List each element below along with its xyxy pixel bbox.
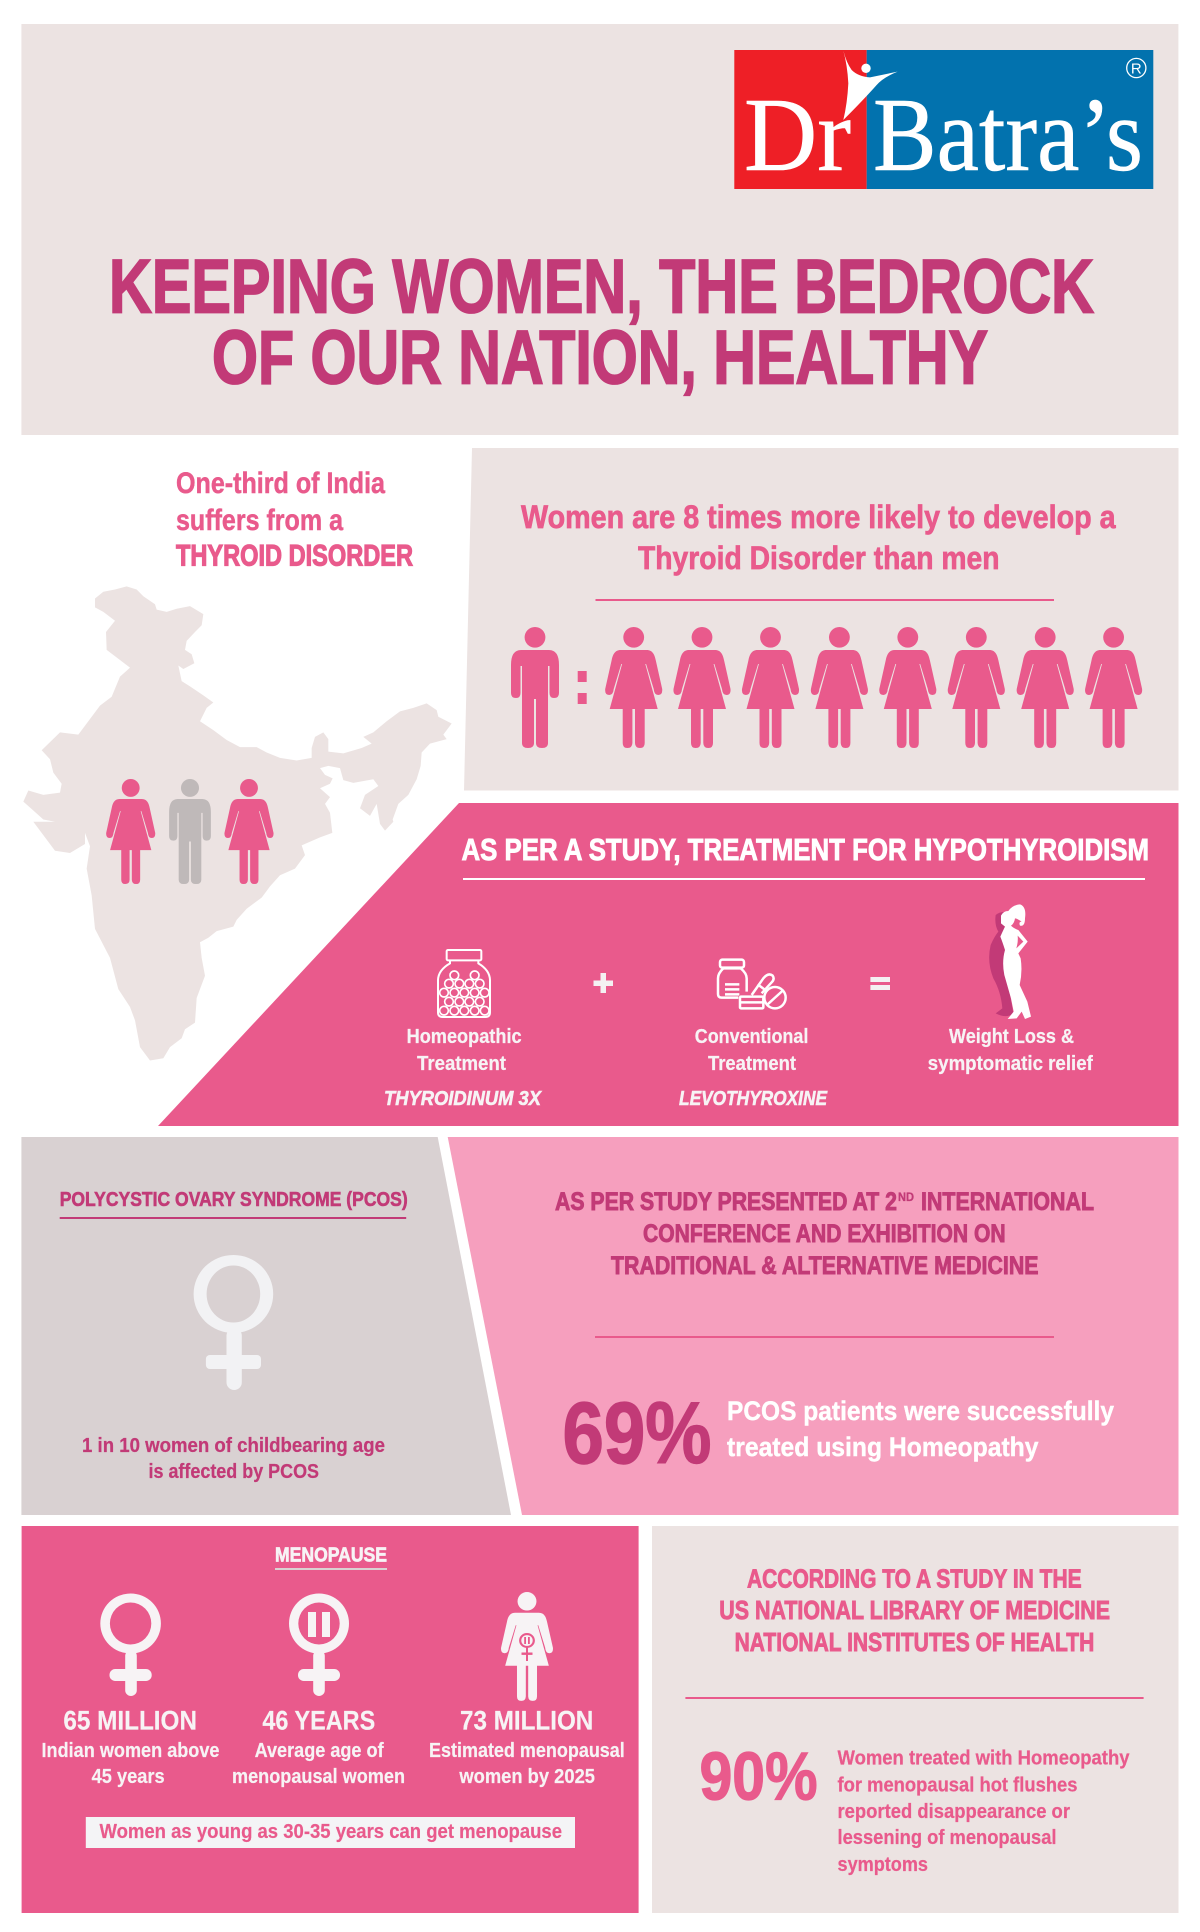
panel: menopause homeopathy study [652, 1526, 1178, 1913]
heading [719, 1564, 1110, 1657]
panel: header [21, 24, 1178, 435]
panel: hypothyroidism treatment [158, 803, 1178, 1126]
text block: conventional treatment: Treatment [708, 1053, 796, 1075]
stat: 46 years: 46 YEARS [262, 1706, 375, 1736]
heading: MENOPAUSE [275, 1544, 387, 1566]
text block: 1 in 10 women: is affected by PCOS [148, 1461, 319, 1483]
icon: man [169, 779, 211, 884]
text block: women treated with homeopathy: Women treated with Homeopathy [838, 1746, 1130, 1770]
text block: weight loss result: Weight Loss & [949, 1026, 1074, 1048]
text block: 1 in 10 women: 1 in 10 women of childbearing age [82, 1435, 385, 1457]
logo: Dr Batra's [734, 50, 1153, 193]
icon: weight loss silhouette [989, 904, 1031, 1019]
panel: PCOS homeopathy study [448, 1137, 1178, 1515]
icon: woman with menopause symbol [501, 1592, 553, 1701]
heading: TRADITIONAL & ALTERNATIVE MEDICINE [611, 1252, 1038, 1280]
text block: 1 in 10 women [82, 1435, 385, 1483]
icon: female symbol [194, 1255, 273, 1390]
heading: INTERNATIONAL [921, 1188, 1094, 1216]
logo: Dr Batra's: Batra’s [873, 76, 1143, 193]
icon: woman left [106, 779, 155, 884]
text block: homeopathic treatment [384, 1026, 543, 1110]
text block: women treated with homeopathy: lessening of menopausal [838, 1826, 1056, 1849]
text block: women treated with homeopathy: for menopausal hot flushes [838, 1774, 1078, 1796]
panel: women 8 times more likely [464, 448, 1178, 790]
heading: POLYCYSTIC OVARY SYNDROME (PCOS) [60, 1189, 408, 1211]
text block: one-third of India: THYROID DISORDER [176, 540, 413, 572]
logo: Dr Batra's: R [1131, 60, 1142, 78]
text block: homeopathic treatment: Treatment [417, 1053, 506, 1075]
heading: ACCORDING TO A STUDY IN THE [747, 1564, 1082, 1594]
icon: conventional medicine [718, 960, 786, 1008]
heading: ND [898, 1190, 914, 1204]
stat: 65 million: 65 MILLION [63, 1706, 197, 1736]
heading: US NATIONAL LIBRARY OF MEDICINE [719, 1595, 1110, 1625]
text block: weight loss result: symptomatic relief [928, 1053, 1093, 1075]
callout: young menopause: Women as young as 30-35 years can get menopause [100, 1821, 562, 1843]
stat: 73 million: 73 MILLION [460, 1706, 593, 1736]
text block: women treated with homeopathy [838, 1746, 1130, 1876]
icon: female symbol [100, 1593, 161, 1696]
text block: conventional treatment: Conventional [695, 1026, 808, 1048]
heading [555, 1188, 1094, 1280]
icon: equals [870, 977, 890, 990]
icon: plus [594, 973, 613, 993]
text block: women treated with homeopathy: reported disappearance or [838, 1800, 1070, 1823]
title [109, 244, 1094, 400]
icon: female symbol with pause [289, 1594, 349, 1696]
stat: 73 million: Estimated menopausal [429, 1740, 625, 1762]
text block: conventional treatment: LEVOTHYROXINE [679, 1088, 828, 1110]
logo: Dr Batra's: Dr [744, 76, 851, 193]
callout: young menopause [86, 1817, 575, 1848]
stat: 65 million [42, 1706, 220, 1788]
stat: 46 years: Average age of [255, 1740, 384, 1762]
panel: menopause [22, 1526, 639, 1913]
text block: homeopathic treatment: Homeopathic [407, 1026, 522, 1048]
stat: 65 million: 45 years [92, 1766, 165, 1788]
map: India with thyroid statistic figures [23, 586, 452, 1061]
stat: 65 million: Indian women above [42, 1740, 220, 1762]
icon: homeopathic jar [438, 950, 490, 1017]
text block: conventional treatment [679, 1026, 828, 1110]
text block: weight loss result [928, 1026, 1093, 1075]
heading: NATIONAL INSTITUTES OF HEALTH [735, 1627, 1094, 1657]
text block: homeopathic treatment: THYROIDINUM 3X [384, 1088, 543, 1110]
text block: PCOS patients [727, 1396, 1114, 1462]
text block: PCOS patients: treated using Homeopathy [727, 1432, 1038, 1462]
title: OF OUR NATION, HEALTHY [212, 316, 988, 400]
text block: one-third of India: One-third of India [176, 467, 385, 500]
heading: Thyroid Disorder than men [638, 540, 1000, 576]
heading: AS PER STUDY PRESENTED AT 2 [555, 1188, 897, 1216]
stat: 46 years [232, 1706, 405, 1788]
heading: Women are 8 times more likely to develop a [521, 499, 1116, 535]
panel: PCOS [21, 1137, 511, 1515]
icon: woman right [224, 779, 274, 884]
text block: one-third of India: suffers from a [176, 504, 343, 537]
icon row: 1 man to 8 women ratio [511, 627, 1142, 748]
stat: 73 million: women by 2025 [458, 1766, 595, 1788]
stat: 46 years: menopausal women [232, 1766, 405, 1788]
text block: PCOS patients: PCOS patients were successfully [727, 1396, 1114, 1426]
heading: CONFERENCE AND EXHIBITION ON [643, 1220, 1006, 1248]
stat: 69%: 69% [562, 1385, 712, 1482]
heading [521, 499, 1116, 576]
text block: women treated with homeopathy: symptoms [838, 1853, 928, 1876]
text block: one-third of India [176, 467, 413, 572]
stat: 90%: 90% [700, 1738, 818, 1814]
stat: 73 million [429, 1706, 625, 1788]
